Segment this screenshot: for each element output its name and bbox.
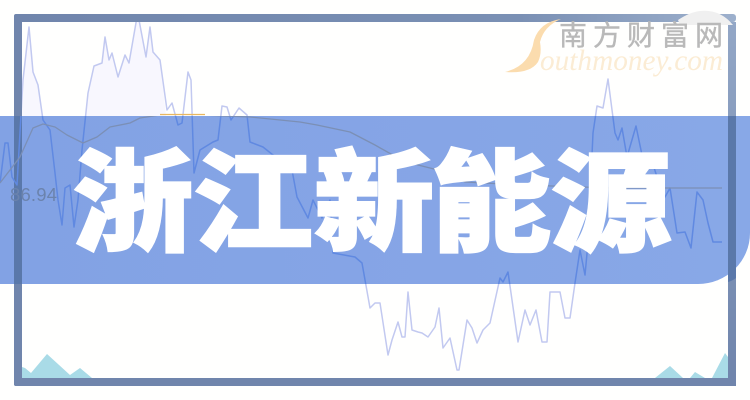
logo: Chinese name: 南方财富网	[559, 20, 723, 51]
chart: orange peak of moving average	[160, 114, 205, 116]
title: 浙江新能源	[73, 143, 671, 266]
frame seen through the band	[14, 116, 736, 284]
chart: moving average and price lines inside the band	[0, 116, 722, 284]
icon: mountains bottom right	[655, 353, 728, 378]
logo: swoosh S	[505, 19, 561, 72]
logo: southmoney	[505, 11, 733, 77]
axis value: 86.94	[10, 184, 57, 205]
logo: domain: outhmoney.com	[540, 44, 723, 77]
icon: mountains bottom left	[22, 354, 92, 378]
logo: cloud	[678, 11, 733, 25]
band: title background	[0, 116, 750, 284]
chart: pale area fill under line	[22, 17, 166, 116]
